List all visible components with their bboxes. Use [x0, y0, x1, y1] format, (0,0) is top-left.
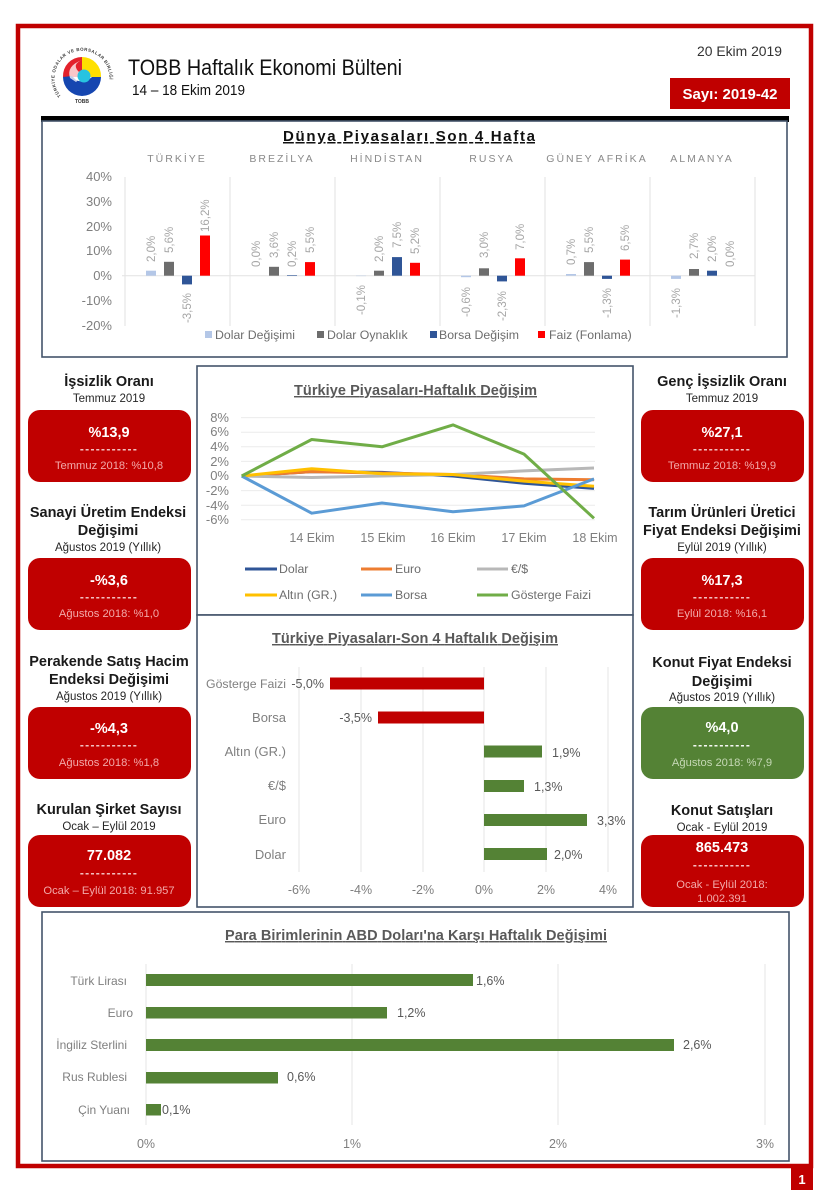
x axis labels: 17 Ekim: [501, 531, 547, 545]
value labels: [291, 677, 626, 862]
icon: TOBB logo: TOBB: [75, 99, 89, 105]
indicator: industrial production: -%3,6: [90, 573, 128, 589]
grid lines: [146, 964, 765, 1125]
indicator: new companies: Ocak – Eylül 2019: [62, 821, 156, 833]
rotated data labels: 7,5%: [392, 222, 404, 248]
x axis labels: 14 Ekim: [289, 531, 335, 545]
value labels: [162, 974, 712, 1117]
indicator: unemployment: -----------: [80, 442, 138, 456]
rotated data labels: 2,0%: [146, 236, 158, 262]
indicator: producer price: Fiyat Endeksi Değişimi: [643, 523, 801, 539]
issue number badge: Sayı: 2019-42: [682, 86, 778, 103]
category labels: İngiliz Sterlini: [56, 1038, 127, 1052]
legend: Dolar: [279, 562, 308, 576]
indicator: housing price: Konut Fiyat Endeksi: [652, 655, 792, 671]
rotated data labels: 3,6%: [269, 232, 281, 258]
y axis labels: [82, 169, 112, 333]
indicator: unemployment: Temmuz 2019: [73, 393, 145, 405]
value labels: 1,3%: [534, 780, 562, 794]
rotated data labels: -0,1%: [356, 285, 368, 315]
legend: [205, 328, 632, 342]
rotated data labels: 7,0%: [515, 224, 527, 250]
category labels: €/$: [268, 778, 287, 793]
value labels: 2,6%: [683, 1038, 712, 1052]
legend: Faiz (Fonlama): [549, 328, 632, 342]
indicator: unemployment: İşsizlik Oranı: [64, 373, 154, 390]
x axis labels: 2%: [537, 883, 555, 897]
indicator: retail sales: -----------: [80, 738, 138, 752]
category labels: Gösterge Faizi: [206, 677, 286, 691]
x axis labels: [288, 883, 617, 897]
indicator: housing sales: Ocak - Eylül 2019: [677, 822, 767, 834]
country headers: [147, 152, 734, 165]
black header rule: [41, 116, 789, 122]
rotated data labels: 2,7%: [689, 233, 701, 259]
indicator: retail sales: [28, 654, 191, 779]
bar chart: currencies: [146, 974, 674, 1116]
indicator: producer price: -----------: [693, 590, 751, 604]
indicator: producer price: [641, 504, 804, 630]
value labels: 3,3%: [597, 814, 626, 828]
rotated data labels: 3,0%: [479, 232, 491, 258]
x axis labels: 15 Ekim: [360, 531, 406, 545]
indicator: housing price: -----------: [693, 738, 751, 752]
y axis labels: 40%: [86, 169, 112, 184]
y axis labels: -20%: [82, 318, 112, 333]
heading: world markets: Dünya Piyasaları Son 4 Hafta: [283, 128, 536, 145]
rotated data labels: 5,6%: [164, 227, 176, 253]
rotated data labels: 0,0%: [251, 241, 263, 267]
legend: €/$: [511, 562, 528, 576]
indicator: retail sales: Perakende Satış Hacim: [29, 654, 189, 670]
country headers: RUSYA: [469, 153, 515, 165]
category labels: Dolar: [255, 847, 287, 862]
y axis labels: 0%: [210, 468, 229, 483]
indicator: retail sales: Endeksi Değişimi: [49, 672, 169, 688]
category labels: [56, 974, 133, 1117]
grid lines: [241, 418, 595, 520]
legend: Borsa: [395, 588, 427, 602]
indicator: new companies: 77.082: [87, 848, 131, 864]
heading: 4 week change: Türkiye Piyasaları-Son 4 Haftalık Değişim: [272, 631, 558, 647]
x axis labels: 2%: [549, 1137, 567, 1151]
indicator: youth unemployment: Genç İşsizlik Oranı: [657, 373, 787, 390]
y axis labels: 0%: [93, 268, 112, 283]
rotated data labels: [146, 199, 737, 323]
y axis labels: 10%: [86, 243, 112, 258]
indicator: youth unemployment: Temmuz 2018: %19,9: [668, 460, 776, 472]
group separators and zero line: [122, 177, 755, 326]
x axis labels: 16 Ekim: [430, 531, 476, 545]
bar chart: dollar change, volatility, stock change, interest: [146, 236, 717, 284]
y axis labels: [206, 410, 229, 527]
x axis labels: 0%: [137, 1137, 155, 1151]
value labels: 1,9%: [552, 746, 580, 760]
y axis labels: -10%: [82, 293, 112, 308]
rotated data labels: 5,5%: [305, 227, 317, 253]
x axis labels: 4%: [599, 883, 617, 897]
indicator: unemployment: [28, 373, 191, 482]
y axis labels: 30%: [86, 194, 112, 209]
grid lines: [299, 667, 608, 872]
indicator: housing sales: -----------: [693, 858, 751, 872]
category labels: Türk Lirası: [70, 974, 127, 988]
y axis labels: -2%: [206, 483, 229, 498]
indicator: producer price: Eylül 2018: %16,1: [677, 608, 767, 620]
legend: Dolar Oynaklık: [327, 328, 408, 342]
indicator: retail sales: Ağustos 2019 (Yıllık): [56, 691, 162, 703]
indicator: producer price: Eylül 2019 (Yıllık): [677, 542, 767, 554]
indicator: industrial production: Sanayi Üretim Endeksi: [30, 504, 186, 521]
legend: [245, 562, 591, 602]
x axis labels: 1%: [343, 1137, 361, 1151]
value labels: -5,0%: [291, 677, 324, 691]
indicator: industrial production: -----------: [80, 590, 138, 604]
indicator: industrial production: Değişimi: [78, 523, 138, 539]
page number badge: [791, 1168, 813, 1190]
indicator: new companies: Ocak – Eylül 2018: 91.957: [43, 885, 175, 897]
country headers: BREZİLYA: [249, 152, 315, 165]
rotated data labels: 0,7%: [566, 239, 578, 265]
indicator: youth unemployment: [641, 373, 804, 482]
y axis labels: 8%: [210, 410, 229, 425]
category labels: Altın (GR.): [225, 744, 286, 759]
category labels: Euro: [108, 1006, 133, 1020]
indicator: housing sales: [641, 803, 804, 907]
rotated data labels: 5,2%: [410, 228, 422, 254]
rotated data labels: 0,0%: [725, 241, 737, 267]
legend: Borsa Değişim: [439, 328, 519, 342]
rotated data labels: 6,5%: [620, 225, 632, 251]
icon: TOBB logo: TÜRKİYE ODALAR VE BORSALAR BİRLİĞİ: [51, 48, 114, 98]
value labels: 1,2%: [397, 1006, 426, 1020]
indicator: retail sales: -%4,3: [90, 721, 128, 737]
y axis labels: 2%: [210, 454, 229, 469]
legend: Gösterge Faizi: [511, 588, 591, 602]
indicator: producer price: Tarım Ürünleri Üretici: [648, 504, 796, 521]
rotated data labels: -3,5%: [182, 293, 194, 323]
category labels: Çin Yuanı: [78, 1103, 130, 1117]
rotated data labels: -1,3%: [602, 288, 614, 318]
country headers: ALMANYA: [670, 153, 734, 165]
country headers: TÜRKİYE: [147, 152, 207, 165]
indicator: retail sales: Ağustos 2018: %1,8: [59, 757, 159, 769]
category labels: Borsa: [252, 710, 287, 725]
y axis labels: -4%: [206, 498, 229, 513]
rotated data labels: 2,0%: [374, 236, 386, 262]
indicator: housing price: Ağustos 2018: %7,9: [672, 757, 772, 769]
x axis labels: 0%: [475, 883, 493, 897]
indicator: unemployment: Temmuz 2018: %10,8: [55, 460, 163, 472]
indicator: industrial production: [28, 504, 191, 630]
x axis labels: 3%: [756, 1137, 774, 1151]
x axis labels: -6%: [288, 883, 310, 897]
y axis labels: 20%: [86, 219, 112, 234]
heading: currencies: Para Birimlerinin ABD Doları'na Karşı Haftalık Değişimi: [225, 928, 607, 944]
rotated data labels: 2,0%: [707, 236, 719, 262]
indicator: housing price: Ağustos 2019 (Yıllık): [669, 692, 775, 704]
indicator: housing sales: 865.473: [696, 840, 748, 856]
rotated data labels: 16,2%: [200, 199, 212, 232]
rotated data labels: 5,5%: [584, 227, 596, 253]
bar chart: 4 week change: [330, 678, 587, 860]
issue date: 20 Ekim 2019: [697, 43, 782, 59]
country headers: HİNDİSTAN: [350, 152, 424, 165]
issue number badge: [670, 78, 790, 109]
country headers: GÜNEY AFRİKA: [546, 152, 648, 165]
x axis labels: [289, 531, 618, 545]
indicator: new companies: [28, 802, 191, 907]
y axis labels: -6%: [206, 512, 229, 527]
category labels: [206, 677, 287, 862]
category labels: Rus Rublesi: [62, 1070, 127, 1084]
value labels: 0,1%: [162, 1103, 190, 1117]
rotated data labels: -2,3%: [497, 291, 509, 321]
indicator: new companies: Kurulan Şirket Sayısı: [36, 802, 182, 818]
value labels: -3,5%: [339, 711, 372, 725]
legend: Altın (GR.): [279, 588, 337, 602]
date range: 14 – 18 Ekim 2019: [132, 83, 245, 99]
indicator: unemployment: %13,9: [88, 425, 130, 441]
indicator: youth unemployment: %27,1: [701, 425, 743, 441]
indicator: new companies: -----------: [80, 866, 138, 880]
page number badge: 1: [798, 1172, 806, 1187]
indicator: producer price: %17,3: [701, 573, 743, 589]
title: TOBB Haftalık Ekonomi Bülteni: [128, 55, 402, 80]
panel: currencies against USD: [42, 912, 789, 1161]
value labels: 2,0%: [554, 848, 582, 862]
indicator: housing price: Değişimi: [692, 674, 752, 690]
panel: Turkey markets weekly change: [197, 366, 633, 615]
legend: Euro: [395, 562, 421, 576]
indicator: housing sales: 1.002.391: [697, 893, 747, 905]
indicator: housing sales: Konut Satışları: [671, 803, 773, 819]
panel: Turkey markets 4 week change: [197, 615, 633, 907]
x axis labels: -2%: [412, 883, 434, 897]
indicator: youth unemployment: Temmuz 2019: [686, 393, 758, 405]
y axis labels: 6%: [210, 424, 229, 439]
value labels: 1,6%: [476, 974, 504, 988]
indicator: housing price: [641, 655, 804, 779]
rotated data labels: -0,6%: [461, 287, 473, 317]
x axis labels: -4%: [350, 883, 372, 897]
indicator: industrial production: Ağustos 2018: %1,0: [59, 608, 159, 620]
panel: world markets last 4 weeks: [42, 121, 787, 357]
indicator: housing sales: Ocak - Eylül 2018:: [676, 879, 768, 891]
indicator: housing price: %4,0: [705, 720, 739, 736]
rotated data labels: 0,2%: [287, 241, 299, 267]
x axis labels: 18 Ekim: [572, 531, 618, 545]
indicator: youth unemployment: -----------: [693, 442, 751, 456]
rotated data labels: -1,3%: [671, 288, 683, 318]
x axis labels: [137, 1137, 774, 1151]
category labels: Euro: [259, 812, 286, 827]
indicator: industrial production: Ağustos 2019 (Yıllık): [55, 542, 161, 554]
legend: Dolar Değişimi: [215, 328, 295, 342]
heading: weekly change: Türkiye Piyasaları-Haftalık Değişim: [294, 383, 537, 399]
value labels: 0,6%: [287, 1070, 316, 1084]
line chart: weekly series: [242, 425, 594, 518]
y axis labels: 4%: [210, 439, 229, 454]
